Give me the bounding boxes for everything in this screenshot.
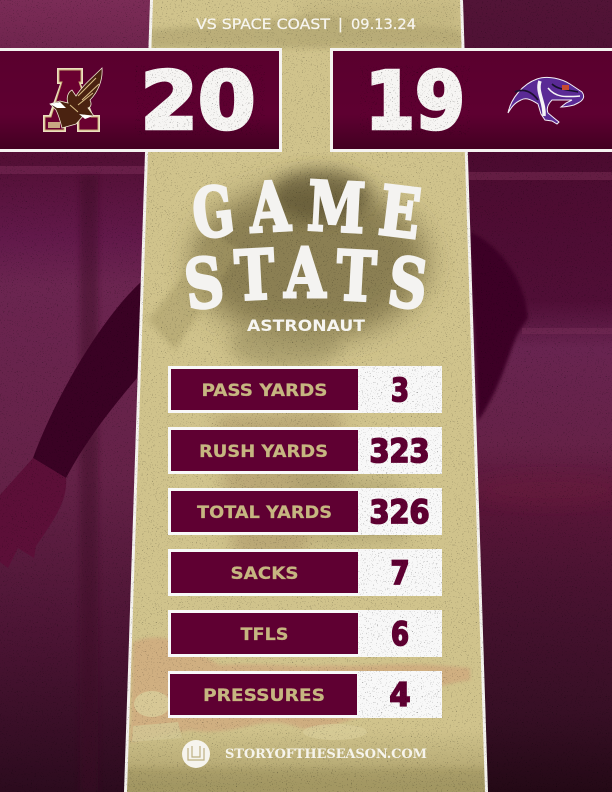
title: GAME STATS: G: [188, 170, 238, 255]
icon: Space Coast viper logo: [508, 77, 584, 124]
top line: opponent and date: 09.13.24: [351, 17, 416, 33]
home score: 20: [140, 56, 256, 148]
speckle on white areas: [135, 65, 470, 718]
stat row: pressures: 4: [390, 676, 410, 714]
stat row: total yards: 326: [370, 493, 430, 531]
stat row: rush yards: RUSH YARDS: [199, 442, 328, 462]
footer website: STORYOFTHESEASON.COM: [225, 747, 427, 762]
stat row: total yards: TOTAL YARDS: [197, 503, 332, 523]
home score panel: [0, 48, 282, 152]
icon: story of the season badge: [182, 740, 210, 768]
stat row: total yards: [168, 488, 442, 535]
stat row: pass yards: 3: [391, 371, 409, 409]
stat row: rush yards: 323: [370, 432, 430, 470]
stat row: sacks: 7: [390, 554, 410, 592]
away score panel: [330, 48, 612, 152]
title: GAME STATS: S: [180, 243, 228, 326]
stat row: rush yards: [168, 427, 442, 474]
stat row: sacks: [168, 549, 442, 596]
stat row: pass yards: PASS YARDS: [202, 381, 328, 401]
top line: opponent and date: |: [338, 17, 343, 33]
stat row: sacks: SACKS: [230, 564, 298, 584]
subtitle: team name: ASTRONAUT: [247, 316, 365, 335]
away score: 19: [365, 56, 465, 148]
stat row: tfls: 6: [391, 615, 409, 653]
stat row: tfls: [168, 610, 442, 657]
title: GAME STATS: S: [384, 243, 432, 326]
title: GAME STATS: A: [247, 167, 293, 249]
stat row: pass yards: [168, 366, 442, 413]
title: GAME STATS: M: [306, 167, 367, 249]
top line: opponent and date: [196, 17, 416, 33]
title: GAME STATS: T: [233, 236, 277, 317]
title: GAME STATS: A: [284, 235, 326, 314]
stat row: tfls: TFLS: [240, 625, 288, 645]
background: maroon photo left: [0, 0, 306, 792]
stat row: pressures: [168, 671, 442, 718]
center tan band: [120, 0, 500, 792]
title: GAME STATS: T: [334, 237, 378, 318]
top line: opponent and date: VS SPACE COAST: [196, 17, 330, 33]
title: GAME STATS: [180, 167, 432, 326]
stat row: pressures: PRESSURES: [203, 686, 325, 706]
icon: Astronaut eagle logo: [43, 68, 102, 132]
title: GAME STATS: E: [375, 172, 425, 255]
background: maroon photo right: [306, 0, 612, 792]
